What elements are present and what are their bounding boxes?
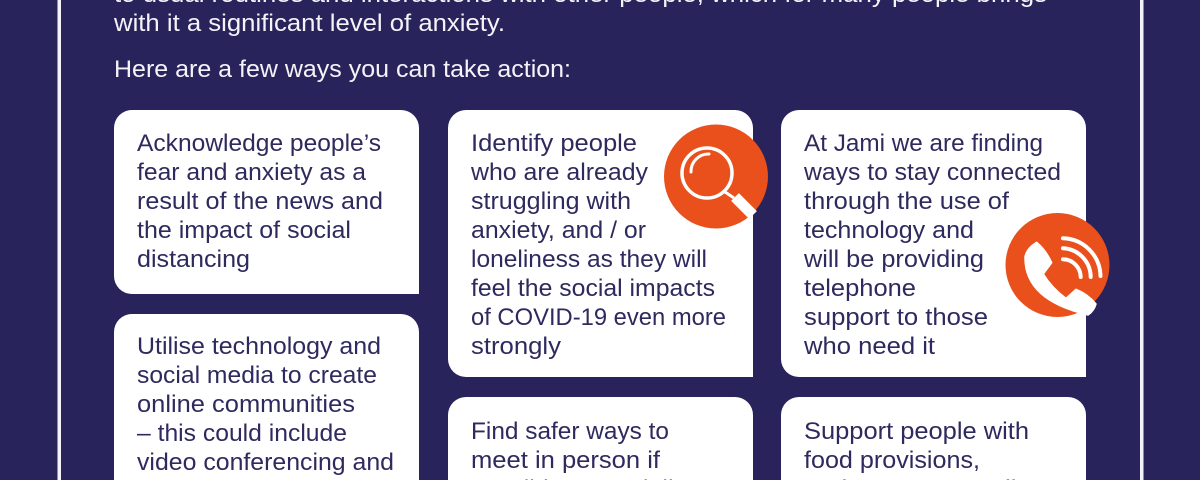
card: acknowledge fear [114,110,419,294]
card: identify people: anxiety, and / or [471,217,646,244]
card: stay connected: ways to stay connected [803,159,1061,186]
card: food provisions: food provisions, [804,447,980,474]
card: stay connected: will be providing [803,246,984,273]
card: identify people [448,110,753,377]
card: identify people: feel the social impacts [471,275,715,302]
card: online communities: – this could include [137,420,347,447]
card: stay connected: through the use of [804,188,1009,215]
card: acknowledge fear: distancing [137,246,250,273]
intro text: with it a significant level of anxiety. [113,10,505,37]
card: acknowledge fear: Acknowledge people’s [137,130,381,157]
intro text: Here are a few ways you can take action: [114,56,571,83]
card: online communities [114,314,419,480]
card: safer ways to meet [448,397,753,480]
icon: magnifying glass [664,124,768,228]
intro text [113,0,1047,83]
card: identify people: struggling with [471,188,631,215]
card: identify people: strongly [471,333,562,360]
card: safer ways to meet: meet in person if [471,447,660,474]
icon: telephone [1006,213,1110,317]
card: online communities: Utilise technology and [137,333,381,360]
card: stay connected: who need it [803,333,935,360]
card: online communities: social media to create [137,362,377,389]
card: food provisions: Support people with [804,418,1029,445]
card: online communities: video conferencing and [137,449,394,476]
card: safer ways to meet: Find safer ways to [471,418,669,445]
card: acknowledge fear: result of the news and [137,188,383,215]
card: stay connected: support to those [804,304,988,331]
card: stay connected [781,110,1086,377]
card: stay connected: technology and [804,217,974,244]
card: acknowledge fear: the impact of social [137,217,351,244]
card: identify people: loneliness as they will [471,246,707,273]
card: food provisions [781,397,1086,480]
card: stay connected: At Jami we are finding [804,130,1043,157]
card: stay connected: telephone [804,275,916,302]
card: identify people: who are already [470,159,649,186]
card: acknowledge fear: fear and anxiety as a [137,159,366,186]
card: identify people: of COVID-19 even more [471,304,726,331]
card: identify people: Identify people [471,130,637,157]
card: online communities: online communities [137,391,355,418]
